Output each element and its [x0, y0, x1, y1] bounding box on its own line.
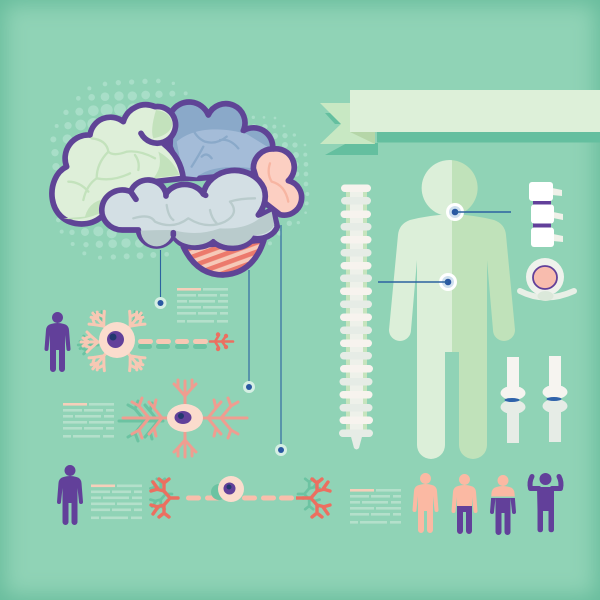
joint right: [542, 356, 568, 442]
halftone dots behind brain: [50, 79, 309, 260]
brain: [52, 102, 302, 275]
body pin: neck: [446, 203, 511, 221]
spine: [339, 184, 373, 450]
text block 1: [177, 288, 228, 323]
neuron 1: [78, 307, 233, 375]
ribbon banner: [320, 90, 600, 155]
grey lobe: [102, 170, 277, 248]
vertebrae detail: [529, 182, 563, 247]
blue lobe: [170, 102, 273, 178]
connector pins from brain: [154, 225, 287, 456]
green lobe: [52, 105, 183, 224]
pink lobe: [253, 149, 302, 215]
figure: purple legs: [452, 474, 478, 534]
joint left: [500, 357, 526, 443]
neuron 3: [150, 476, 330, 517]
text block 3: [91, 484, 142, 519]
figure: purple body: [490, 475, 516, 535]
body pin: torso: [378, 273, 457, 291]
human body figure: [389, 160, 515, 459]
vertebra cross section: [520, 258, 574, 301]
cerebellum: [183, 240, 264, 275]
text block 4: [350, 489, 401, 524]
neuron 2: [119, 380, 247, 457]
text block 2: [63, 403, 114, 438]
person icon 1: [44, 312, 70, 372]
person icon 2: [57, 465, 83, 525]
figure: all pink: [412, 473, 438, 533]
figure: flexing purple: [530, 473, 561, 532]
